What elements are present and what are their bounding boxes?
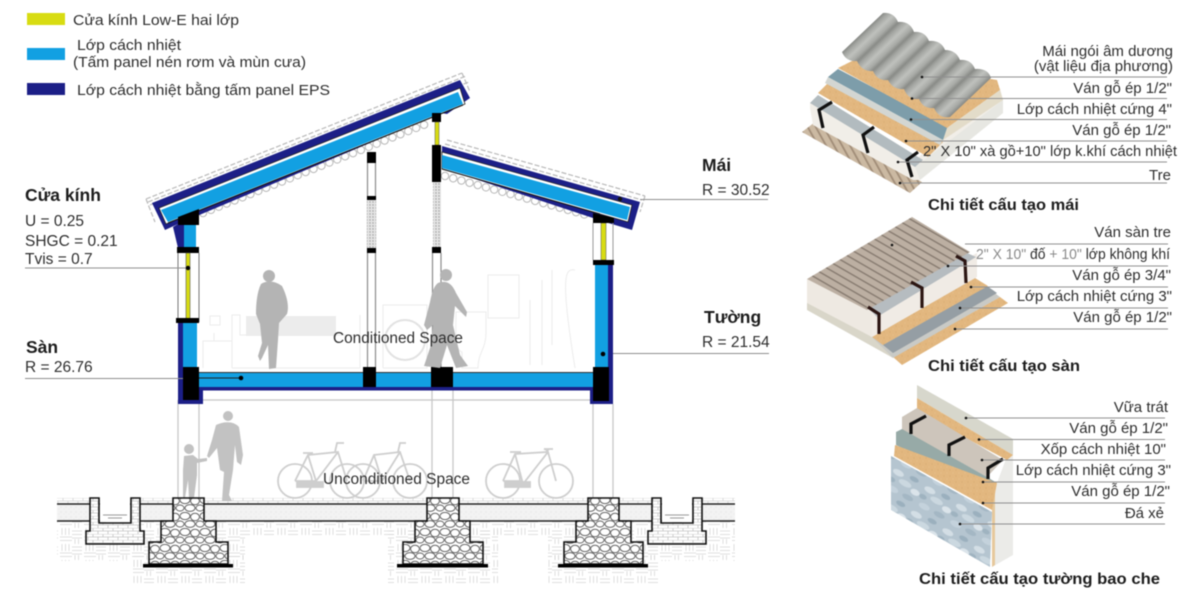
roof labels: Mái ngói âm dương [1042,43,1173,60]
floor leader lines [891,244,1168,330]
label: unconditioned space: Unconditioned Space [323,471,470,488]
callout: glazing: SHGC = 0.21 [25,233,118,250]
floor labels: 2" X 10" đố + 10" lớp không khí [976,246,1171,263]
left drain [86,498,144,544]
floor labels: Lớp cách nhiệt cứng 3" [1017,288,1172,305]
left wall [173,209,203,404]
floor labels: Ván sàn tre [1094,224,1171,241]
interior column 1 [363,152,376,387]
house section [146,73,645,498]
brick soil hatch [57,521,735,583]
roof rafters [819,102,918,177]
legend text: EPS panel: Lớp cách nhiệt bằng tấm panel EPS [77,82,330,99]
bicycles [278,443,573,498]
left roof [152,80,470,230]
person silhouette right [424,269,468,368]
footing 3 [558,498,648,568]
wall studs [911,416,1003,479]
ground and foundations [57,498,735,583]
callout: glazing: Cửa kính [25,185,101,205]
grey support lines [178,388,613,498]
wall labels [1016,399,1171,522]
callout: floor: R = 26.76 [25,359,93,376]
ground slab [57,498,735,521]
legend swatch: EPS panel [27,83,65,95]
floor labels: Ván gỗ ép 3/4" [1072,267,1171,284]
legend swatch: Low-E glass [27,13,65,25]
floor labels [976,224,1172,326]
faint interior furniture [203,270,575,368]
right roof tiles [445,140,645,212]
left roof tiles [146,73,470,222]
wall title: Chi tiết cấu tạo tường bao che [919,571,1160,588]
callout: glazing: U = 0.25 [25,213,84,230]
callout: roof: Mái [702,155,731,175]
floor title: Chi tiết cấu tạo sàn [928,358,1080,375]
wall labels: Đá xẻ [1125,505,1164,522]
wall leader lines [959,417,1165,525]
right roof [442,146,640,230]
footing 1 [143,498,233,568]
legend text: insulation: Lớp cách nhiệt [77,37,182,54]
interior column 2 [431,113,453,387]
adult and child silhouettes [183,411,243,501]
floor joists [868,256,966,334]
ceiling bamboo left [203,124,426,213]
legend text: insulation: (Tấm panel nén rơm và mùn cưa) [73,54,306,71]
floor [199,372,593,390]
callout: floor: Sàn [26,337,58,357]
panel: roof detail [802,13,1178,214]
footing 2 [397,498,488,568]
legend [27,12,330,99]
right wall [590,213,614,404]
floor layer illustration [807,217,1008,365]
roof labels: Lớp cách nhiệt cứng 4" [1017,101,1172,118]
roof labels [923,43,1178,184]
callout: roof [640,155,770,200]
wall layer illustration [891,385,1013,567]
callout: roof: R = 30.52 [702,182,770,199]
legend text: insulation [73,37,306,71]
wall labels: Ván gỗ ép 1/2" [1069,420,1168,437]
right drain [648,498,706,544]
roof title: Chi tiết cấu tạo mái [928,197,1079,214]
label: conditioned space: Conditioned Space [333,330,463,347]
roof tiles [842,13,991,117]
wall labels: Lớp cách nhiệt cứng 3" [1016,462,1171,479]
roof labels: (vật liệu địa phương) [1034,58,1173,75]
callout: wall: R = 21.54 [702,334,770,351]
callout: wall: Tường [704,307,761,327]
roof labels: 2" X 10" xà gồ+10" lớp k.khí cách nhiệt [923,143,1178,160]
roof labels: Ván gỗ ép 1/2" [1072,122,1171,139]
ceiling bamboo right [445,176,590,216]
roof leader lines [897,76,1167,184]
panel: floor detail [807,217,1172,375]
callout: floor [25,337,183,378]
panel: wall detail [891,385,1171,588]
legend text: Low-E glass: Cửa kính Low-E hai lớp [73,12,239,29]
wall labels: Ván gỗ ép 1/2" [1071,483,1170,500]
wall labels: Xốp cách nhiệt 10" [1041,441,1166,458]
roof labels: Ván gỗ ép 1/2" [1073,80,1172,97]
callout: glazing: Tvis = 0.7 [25,251,93,268]
legend swatch: insulation [27,48,65,60]
roof labels: Tre [1149,167,1171,184]
callout: wall [613,307,770,354]
person silhouette left [256,270,288,369]
floor labels: Ván gỗ ép 1/2" [1073,309,1172,326]
callout: glazing [25,185,190,270]
roof layer illustration [802,58,1003,193]
wall labels: Vữa trát [1114,399,1169,416]
